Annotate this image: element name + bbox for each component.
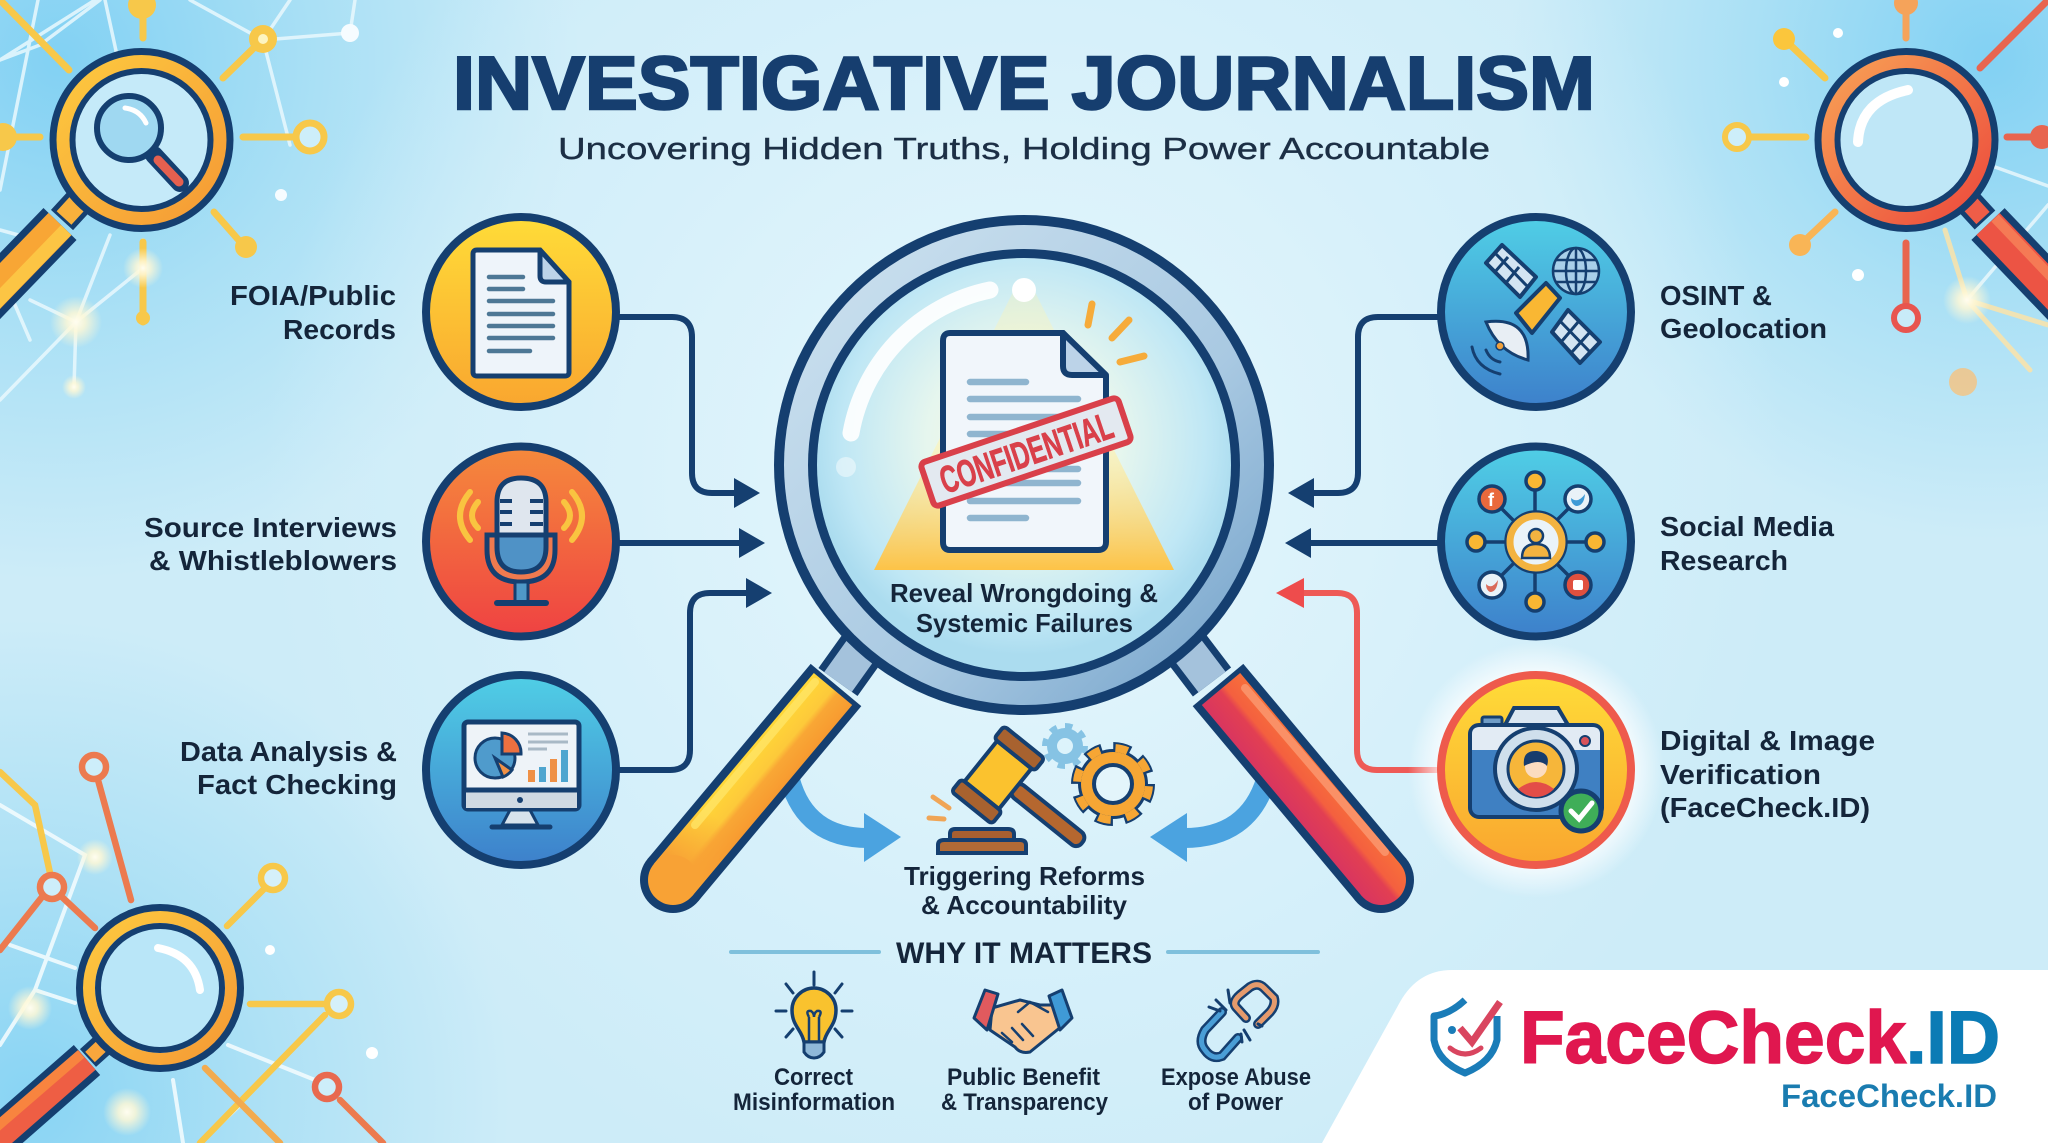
label: Expose Abuse of Power: of Power <box>1188 1089 1283 1116</box>
panel: social media icon: f <box>1488 490 1495 510</box>
label: Source Interviews & Whistleblowers: Source Interviews <box>144 512 397 543</box>
magnifier top left <box>0 52 230 323</box>
panel: FOIA/Public Records icon <box>426 217 616 407</box>
center label: Systemic Failures <box>916 608 1133 638</box>
label: Triggering Reforms & Accountability: Triggering Reforms <box>904 861 1145 891</box>
panel: satellite icon <box>1441 217 1631 407</box>
subtitle: Uncovering Hidden Truths, Holding Power Accountable <box>558 131 1490 166</box>
lens highlight <box>836 278 1036 477</box>
central magnifying glass <box>640 215 1414 913</box>
arrow: right curved <box>1150 780 1266 862</box>
label: FOIA/Public Records <box>230 280 396 345</box>
label: Public Benefit & Transparency <box>941 1064 1109 1116</box>
panel: logo <box>1322 970 2048 1143</box>
label: Correct Misinformation: Correct <box>774 1064 853 1091</box>
network top right <box>1725 0 2048 396</box>
icon: light bulb <box>776 972 852 1058</box>
label: FOIA/Public Records: Records <box>283 314 396 345</box>
connectors and arrows <box>615 317 1442 770</box>
label: Digital & Image Verification (FaceCheck.ID): (FaceCheck.ID) <box>1660 792 1870 823</box>
logo caption: FaceCheck.ID <box>1781 1078 1997 1114</box>
label: Triggering Reforms & Accountability: & Accountability <box>921 890 1128 920</box>
icon: gavel <box>929 726 1108 875</box>
icon: globe <box>1553 248 1599 294</box>
label: Data Analysis & Fact Checking: Fact Checking <box>197 769 397 800</box>
right handle <box>1180 640 1414 913</box>
logo wordmark: .ID <box>1906 996 2000 1079</box>
sparks <box>1088 304 1144 362</box>
label: FOIA/Public Records: FOIA/Public <box>230 280 396 311</box>
icon: gear <box>1077 748 1149 820</box>
label: Triggering Reforms & Accountability <box>904 861 1145 920</box>
label: Source Interviews & Whistleblowers <box>144 512 397 576</box>
label: Data Analysis & Fact Checking: Data Analysis & <box>180 736 397 767</box>
icon: broken chain <box>1202 985 1274 1057</box>
center label: Reveal Wrongdoing & <box>890 578 1158 608</box>
icon: small gear <box>1046 727 1084 765</box>
panel: social media icon <box>1441 446 1631 636</box>
label: Social Media Research: Social Media <box>1660 511 1834 542</box>
label: Digital & Image Verification (FaceCheck.ID): Digital & Image <box>1660 725 1875 756</box>
label: Social Media Research: Research <box>1660 545 1788 576</box>
label: Digital & Image Verification (FaceCheck.ID): Verification <box>1660 759 1821 790</box>
panel: image verification icon <box>1408 642 1664 898</box>
left handle <box>640 640 868 913</box>
label: Public Benefit & Transparency: Public Benefit <box>947 1064 1100 1091</box>
title: INVESTIGATIVE JOURNALISM <box>453 41 1595 125</box>
center label <box>890 578 1158 638</box>
heading: why it matters: WHY IT MATTERS <box>896 937 1152 970</box>
label: Social Media Research <box>1660 511 1834 576</box>
label: Expose Abuse of Power <box>1161 1064 1311 1116</box>
panel: data analysis icon <box>426 675 616 865</box>
label: Correct Misinformation <box>733 1064 895 1116</box>
network bottom left <box>0 755 383 1143</box>
magnifier top right <box>1818 52 2048 315</box>
icon: handshake <box>974 990 1072 1052</box>
magnifier bottom left <box>0 908 240 1143</box>
label: Public Benefit & Transparency: & Transparency <box>941 1089 1109 1116</box>
confidential stamp: CONFIDENTIAL <box>935 405 1119 503</box>
label: Data Analysis & Fact Checking <box>180 736 397 800</box>
label: Digital & Image Verification (FaceCheck.ID) <box>1660 725 1875 823</box>
label: OSINT & Geolocation <box>1660 280 1827 344</box>
lens ring <box>774 215 1274 715</box>
label: Source Interviews & Whistleblowers: & Whistleblowers <box>149 545 397 576</box>
icon: small magnifier <box>97 96 180 183</box>
confidential stamp <box>920 397 1132 507</box>
confidential document <box>943 333 1106 550</box>
label: OSINT & Geolocation: OSINT & <box>1660 280 1772 311</box>
label: Correct Misinformation: Misinformation <box>733 1089 895 1116</box>
network top left <box>0 0 359 400</box>
logo wordmark: FaceCheck <box>1520 996 1907 1079</box>
label: OSINT & Geolocation: Geolocation <box>1660 313 1827 344</box>
lens light beam <box>874 290 1174 570</box>
arrow: left curved <box>790 780 901 862</box>
panel: microphone icon <box>426 446 616 636</box>
icon: shield <box>1434 1000 1500 1073</box>
label: Expose Abuse of Power: Expose Abuse <box>1161 1064 1311 1091</box>
